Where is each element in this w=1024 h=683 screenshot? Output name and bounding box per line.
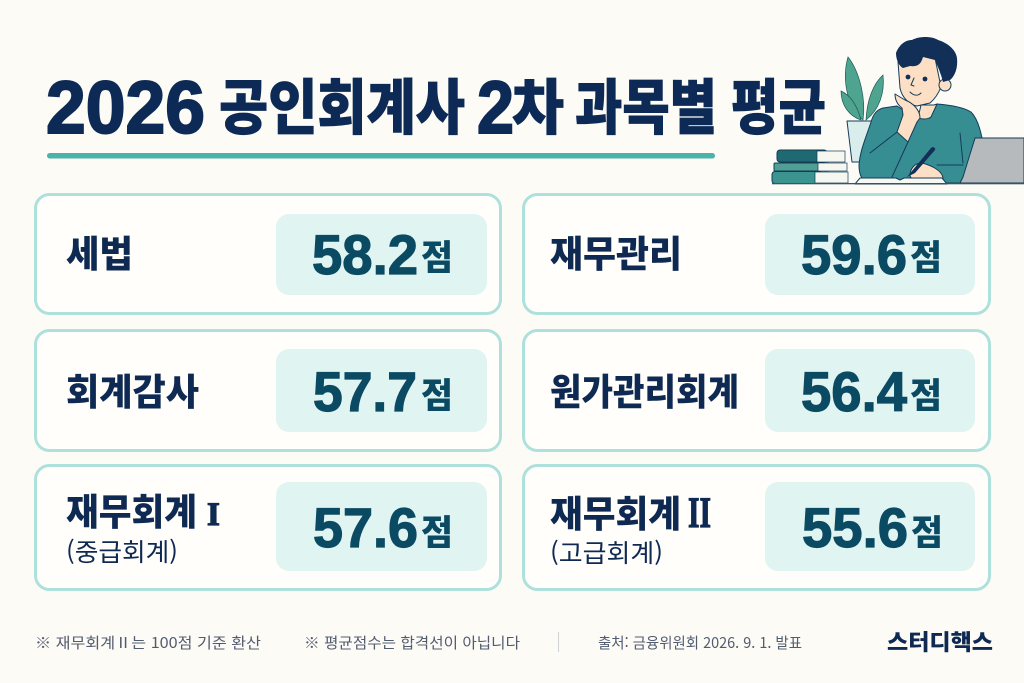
icon: person — [859, 37, 982, 183]
title: 과목별 — [575, 60, 717, 147]
score: 55.6점: 점 — [911, 505, 943, 556]
score: 57.6점: 점 — [421, 505, 453, 556]
score: 59.6점: 점 — [910, 230, 942, 281]
title: 공인회계사 — [219, 60, 465, 147]
panel: 회계감사 — [36, 330, 500, 450]
score: 57.6점: 57.6 — [313, 496, 418, 559]
label: 재무회계 I: 재무회계 — [66, 482, 197, 536]
title — [46, 60, 826, 149]
score: 57.7점: 57.7 — [313, 360, 417, 423]
panel: 원가관리회계 — [524, 330, 990, 450]
panel: 재무관리 — [524, 194, 990, 314]
title: 차 — [512, 60, 564, 147]
icon: open notebook — [855, 178, 947, 184]
sublabel: 고급회계: (고급회계) — [550, 534, 663, 570]
score: 58.2점: 점 — [421, 230, 453, 281]
title: 2 — [477, 66, 514, 149]
source: 출처: 금융위원회 2026. 9. 1. 발표 — [598, 632, 802, 653]
title: 2026 — [46, 66, 205, 149]
score: 58.2점: 58.2 — [312, 223, 418, 286]
label: 회계감사: 회계감사 — [66, 362, 199, 416]
panel: 재무회계 I — [36, 466, 500, 590]
icon: laptop — [960, 138, 1024, 183]
title underline — [47, 153, 715, 158]
panel: 세법 — [36, 194, 500, 314]
panel: 재무회계 II — [524, 466, 990, 590]
brand logo: 스터디핵스 — [887, 625, 993, 657]
label: 원가관리회계: 원가관리회계 — [550, 362, 739, 416]
desk line — [772, 183, 1024, 184]
score: 59.6점: 59.6 — [801, 223, 907, 286]
icon: stacked books — [772, 150, 848, 184]
footnote: conversion note: ※ 재무회계Ⅱ는 100점 기준 환산 — [35, 632, 261, 653]
label: 재무회계 I: I — [207, 497, 220, 533]
score: 55.6점: 55.6 — [802, 496, 908, 559]
label: 재무관리: 재무관리 — [550, 224, 682, 278]
sublabel: 중급회계: (중급회계) — [66, 533, 178, 569]
illustration: student at desk — [772, 37, 1024, 184]
score: 57.7점: 점 — [421, 368, 453, 419]
footnote: not a passing line: ※ 평균점수는 합격선이 아닙니다 — [304, 632, 520, 653]
label: 재무회계 II: 재무회계 — [550, 484, 681, 538]
score: 56.4점: 56.4 — [801, 360, 907, 423]
label: 재무회계 II: II — [688, 490, 711, 537]
title: 평균 — [731, 60, 826, 147]
score: 56.4점: 점 — [910, 368, 942, 419]
label: 세법: 세법 — [66, 224, 133, 278]
icon: plant — [841, 57, 883, 162]
